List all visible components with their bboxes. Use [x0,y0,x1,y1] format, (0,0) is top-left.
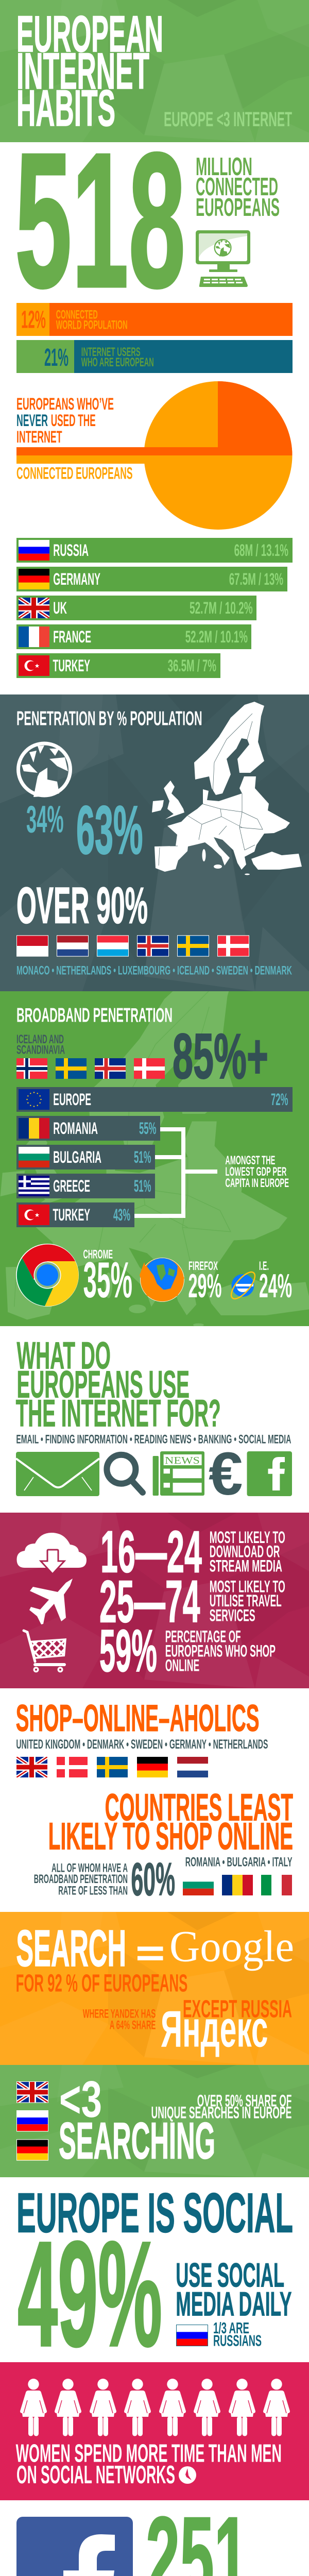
bar: romania: ROMANIA [53,1119,98,1138]
panel: shop online [16,1698,293,1905]
iceland and scandinavia label: SCANDINAVIA [16,1043,65,1057]
icon: shopping cart [24,1631,66,1672]
women statement: ON SOCIAL NETWORKS [16,2461,175,2489]
icon: cloud download [16,1533,87,1574]
panel: facebook [16,2493,282,2576]
heading: BROADBAND PENETRATION [16,1004,173,1026]
panel: broadband penetration: 35% [83,1251,132,1308]
iceland and scandinavia label: ICELAND AND [16,1032,64,1046]
bar: france: FRANCE [53,628,91,646]
icon: globe [19,743,70,797]
icon: facebook [247,1451,292,1496]
bar: europe: 72% [271,1090,288,1109]
bar: romania [16,1116,160,1141]
broadband note: ALL OF WHOM HAVE A [52,1861,128,1875]
panel: age groups and shopping: 59% [99,1617,157,1684]
flags row [16,1757,208,1777]
over 90% heading: OVER 90% [16,877,148,934]
pie label: never used: USED THE [51,411,96,430]
panel: penetration by population: 34% [26,798,64,841]
yandex note [83,2007,156,2032]
scandinavian flags [16,1058,165,1079]
search share note [151,2091,291,2122]
pie label: never used [16,395,114,446]
bar: 12% connected world population [16,303,293,336]
pie label: never used: INTERNET [16,428,62,446]
broadband note [34,1861,128,1897]
panel: age groups and shopping [0,1513,309,1688]
bar: bulgaria: BULGARIA [53,1148,101,1166]
logo: google: Google [169,1922,294,1971]
panel: penetration by population: 63% [76,792,143,869]
one third russians: 1/3 ARE [213,2319,249,2337]
59% description [165,1628,276,1674]
icon: newspaper [153,1451,204,1496]
chrome share: CHROME [83,1248,113,1262]
pie label: never used: EUROPEANS WHO’VE [16,395,114,413]
lowest gdp note [225,1154,289,1190]
age 25-74 figure: 25—74 [99,1568,200,1635]
panel: penetration by population [0,694,309,991]
pie chart: never used vs connected [16,381,293,530]
bar: uk: 52.7M / 10.2% [190,599,253,617]
bar: turkey: TURKEY [53,1206,90,1224]
yandex note: WHERE YANDEX HAS [83,2007,156,2021]
heading: WHAT DO [16,1334,111,1377]
bar: europe [16,1087,293,1112]
bar: 21% internet users who are european: INTERNET USERS [81,345,141,359]
heading [16,1334,221,1434]
icon: computer [196,230,250,287]
icon: clock [179,2466,196,2484]
flags row [183,1875,292,1895]
bar: bulgaria: 51% [134,1148,151,1166]
bar: turkey: 36.5M / 7% [168,656,216,675]
bar: turkey [16,1202,134,1227]
panel: broadband penetration [0,966,309,1327]
one third russians [213,2319,262,2349]
flags column [16,2081,48,2161]
title: EUROPEAN [16,5,163,62]
bar: 21% internet users who are european [16,340,293,373]
use social media daily [176,2256,291,2323]
panel: what do europeans use the internet for [16,1334,292,1508]
one third russians: RUSSIANS [213,2331,262,2349]
bar: europe: EUROPE [53,1090,91,1109]
age 25-74 description [210,1578,285,1625]
age 16-24 description [210,1528,285,1575]
million connected europeans label: MILLION [196,153,252,181]
bar: germany [16,567,287,591]
map of europe [152,702,302,875]
bar: russia: RUSSIA [53,541,89,560]
heading: search: SEARCH [16,1920,126,1977]
panel: connected europeans [15,113,293,530]
iceland and scandinavia label [16,1032,65,1057]
bar: 21% internet users who are european: WHO ARE EUROPEAN [81,355,154,369]
title: HABITS [16,79,115,137]
panel: top countries bars [16,538,293,678]
bar: turkey [16,653,220,678]
chrome share [83,1248,132,1308]
broadband note: BROADBAND PENETRATION [34,1872,128,1886]
equals sign [138,1946,163,1960]
panel: header [0,0,309,142]
59% description: PERCENTAGE OF [165,1628,241,1646]
bar: greece [16,1174,155,1198]
bar: uk [16,596,256,620]
flag: russia [176,2325,208,2346]
love symbol: <3 [59,2071,102,2128]
title [16,5,163,137]
bar: 12% connected world population: CONNECTED [56,308,98,322]
bar: germany: GERMANY [53,570,100,588]
icon: magnifier [107,1455,143,1493]
icons: women row [20,2379,290,2436]
pie label: connected: CONNECTED EUROPEANS [16,464,133,482]
firefox share: FIREFOX [188,1259,218,1273]
women statement [16,2440,282,2489]
icon: email [16,1452,99,1496]
pie label: never used: NEVER [16,411,48,430]
age 25-74 description: SERVICES [210,1606,255,1625]
icon: newspaper: NEWS [165,1455,200,1466]
bar: 12% connected world population: WORLD POPULATION [56,318,128,332]
bar: turkey: TURKEY [53,656,90,675]
icon: internet explorer [227,1268,259,1302]
icon: chrome [16,1244,79,1307]
icon: firefox [140,1258,184,1301]
bar: greece: GREECE [53,1177,90,1195]
bar: russia [16,538,293,563]
bracket connector [134,1127,217,1218]
title: INTERNET [16,42,149,99]
flags row [16,935,249,957]
bar: bulgaria [16,1145,155,1170]
bar: 21% internet users who are european: 21% [44,344,68,371]
bar: uk: UK [53,599,67,617]
icon: facebook logo [16,2517,133,2576]
bar: 12% connected world population: 12% [21,307,46,334]
ie share [259,1259,292,1304]
age 16-24 figure: 16—24 [100,1519,202,1585]
bar: france: 52.2M / 10.1% [185,628,248,646]
bar: greece: 51% [134,1177,151,1195]
yandex note: A 64% SHARE [110,2018,156,2032]
panel: search [0,1912,309,2065]
heading: countries least likely [48,1786,293,1857]
firefox share [188,1259,221,1304]
panel: europe is social: 49% [18,2211,162,2378]
ie share: I.E. [259,1259,269,1273]
bar: romania: 55% [139,1119,157,1138]
59% description: ONLINE [165,1656,199,1674]
million connected europeans label [196,153,280,222]
panel: shop online: 60% [131,1854,175,1905]
icon: euro: € [209,1440,243,1508]
panel: women on social networks [0,2362,309,2500]
bar: france [16,624,251,649]
icon: plane [29,1579,73,1624]
panel: searching [0,2065,309,2177]
panel: broadband penetration: 29% [188,1267,221,1304]
broadband note: RATE OF LESS THAN [58,1884,128,1897]
bar: turkey: 43% [113,1206,130,1224]
